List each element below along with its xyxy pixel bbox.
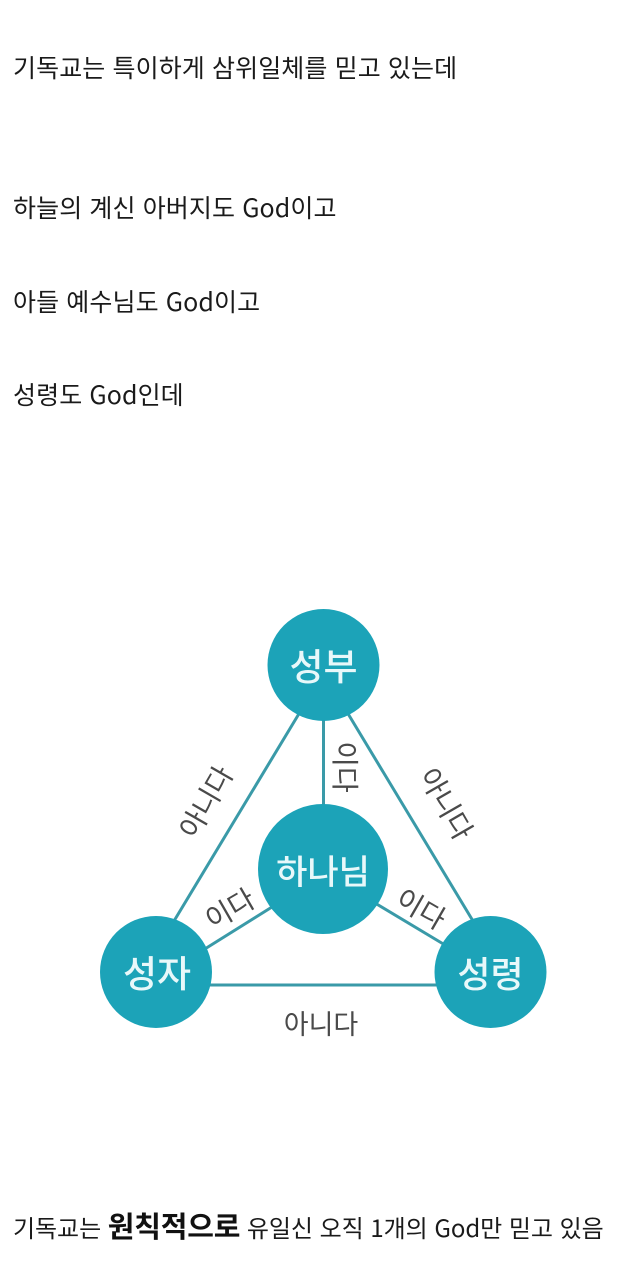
- node: 성자: [100, 916, 212, 1028]
- label: 아니다 bottom: 아니다: [284, 1003, 358, 1042]
- node: 성부: [268, 609, 380, 721]
- label: 아니다 right: 아니다: [410, 760, 484, 847]
- label: 이다 right: 이다: [389, 878, 454, 938]
- node: 성령: 성령: [457, 946, 524, 998]
- connecting lines: [174, 700, 473, 985]
- node: 하나님: [258, 804, 388, 934]
- text: father is God: 하늘의 계신 아버지도 God이고: [13, 189, 337, 225]
- node: 성자: 성자: [123, 944, 191, 998]
- text: conclusion: 기독교는 원칙적으로 유일신 오직 1개의 God만 믿고 있음: [13, 1204, 604, 1246]
- label: 이다 left: 이다: [197, 878, 262, 938]
- text: son is God: 아들 예수님도 God이고: [13, 283, 260, 319]
- text: spirit is God: 성령도 God인데: [13, 376, 184, 412]
- text: trinity intro: 기독교는 특이하게 삼위일체를 믿고 있는데: [13, 49, 457, 85]
- node: 성령: [434, 916, 546, 1028]
- label: 아니다 left: 아니다: [168, 758, 242, 845]
- node: 하나님: 하나님: [276, 845, 370, 894]
- label: 이다 top: 이다: [326, 741, 366, 793]
- node: 성부: 성부: [289, 637, 358, 691]
